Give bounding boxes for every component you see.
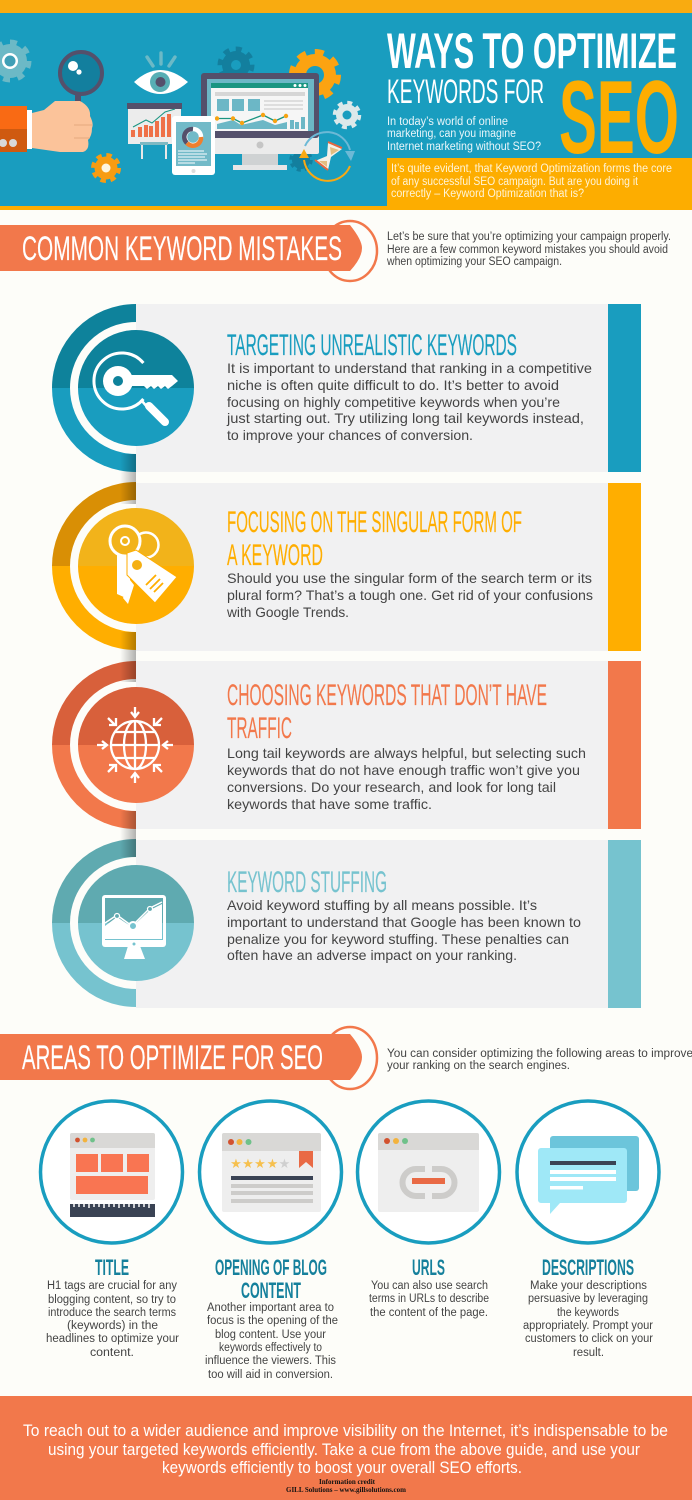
column: descriptions: result. [573,1347,604,1359]
icon: pale gear [334,102,360,128]
heading: TRAFFIC [227,712,292,745]
body text: keywords that have some traffic. [227,796,432,812]
body text: just starting out. Try utilizing long tail keywords instead, [226,410,584,426]
column: opening of blog content: blog content. Use your [215,1329,326,1341]
body text: niche is often quite difficult to do. It’s better to avoid [227,377,559,393]
title: keywords for: KEYWORDS FOR [387,73,544,111]
header question text: Internet marketing without SEO? [387,141,541,153]
icon: eye [134,53,188,94]
column: title: (keywords) in the [67,1320,158,1332]
column: urls: URLS [412,1255,445,1280]
body text: to improve your chances of conversion. [227,427,473,443]
column: title: headlines to optimize your [46,1333,179,1345]
column: descriptions: Make your descriptions [530,1280,647,1292]
intro text: mistakes: Here are a few common keyword mistakes you should avoid [387,244,668,256]
icon: analytics monitor [102,895,166,959]
column: descriptions [523,1255,653,1359]
header orange text: correctly – Keyword Optimization that is? [391,188,584,200]
column: title: introduce the search terms [48,1307,176,1319]
icon circle: opening of blog content: ★ [230,1157,242,1172]
body text: with Google Trends. [226,604,349,620]
intro text: areas [387,1048,692,1072]
column: opening of blog content: keywords effectively to [219,1342,322,1354]
panel: targeting unrealistic keywords [52,304,641,472]
body text [227,745,586,812]
heading: A KEYWORD [227,539,323,572]
closing text [23,1421,668,1477]
heading: KEYWORD STUFFING [227,866,387,899]
icon circle: opening of blog content: ★ [242,1157,254,1172]
icon: lower dark gear [291,150,311,170]
icon: globe with arrows [97,707,173,783]
header panel [0,0,692,210]
heading [227,506,522,572]
closing text: using your targeted keywords efficiently. Take a cue from the above guide, and use your [48,1440,640,1459]
body text: important to understand that Google has been known to [227,914,581,930]
column: descriptions: customers to click on your [525,1333,653,1345]
column: title: TITLE [95,1255,129,1280]
intro text: mistakes [386,231,671,268]
body text: conversions. Do your research, and look for long tail [227,779,556,795]
column: opening of blog content: CONTENT [241,1278,301,1303]
footer panel [0,1396,692,1500]
header orange text [391,163,672,200]
column: title: content. [90,1347,134,1359]
header question text: marketing, can you imagine [387,128,516,140]
column: opening of blog content [205,1255,338,1381]
body text [226,360,592,443]
column: opening of blog content: focus is the opening of the [207,1315,338,1327]
column: opening of blog content: Another important area to [207,1302,334,1314]
column: title [46,1255,179,1359]
icon: magnifier [60,52,102,108]
body text [227,897,581,963]
icon: tablet [172,116,215,175]
column: opening of blog content: influence the viewers. This [205,1355,336,1367]
icon circle: opening of blog content: ★ [254,1157,266,1172]
intro text: areas: your ranking on the search engines. [387,1060,570,1072]
body text: plural form? That’s a tough one. Get rid of your confusions [227,587,593,603]
heading banner: common keyword mistakes [0,221,377,281]
column: urls: You can also use search [371,1280,488,1292]
heading banner: common keyword mistakes: COMMON KEYWORD MISTAKES [22,230,342,268]
panel: focusing on the singular form [52,482,641,651]
icon circle: descriptions [517,1101,659,1243]
body text: keywords that do not have enough traffic won’t give you [227,762,580,778]
heading banner: areas to optimize: AREAS TO OPTIMIZE FOR SEO [22,1039,323,1077]
body text: Long tail keywords are always helpful, but selecting such [227,745,586,761]
column: title: blogging content, so try to [48,1294,176,1306]
icon: keys with tag [110,526,177,604]
body text: It is important to understand that ranking in a competitive [227,360,592,376]
column: urls: terms in URLs to describe [369,1293,489,1305]
column: urls: the content of the page. [370,1307,488,1319]
icon: presentation chart [127,103,182,159]
column: title: H1 tags are crucial for any [47,1280,177,1292]
body text: often have an adverse impact on your ranking. [227,947,517,963]
icon circle: opening of blog content [200,1101,342,1243]
column: urls [369,1255,489,1319]
icon: hourglass [299,132,355,181]
information credit: GILL Solutions – www.gillsolutions.com [286,1485,407,1494]
column: descriptions: appropriately. Prompt your [523,1320,653,1332]
icon circle: urls [358,1101,500,1243]
icon: monitor [201,73,319,170]
icon circle: opening of blog content: ★ [279,1157,290,1172]
closing text: keywords efficiently to boost your overall SEO efforts. [162,1458,522,1477]
icon: key in magnifier [94,353,178,422]
information credit: Information credit [319,1477,375,1486]
icon: hand and cuff [0,101,93,152]
heading banner: areas to optimize [0,1027,377,1089]
header question text: In today’s world of online [387,116,508,128]
column: opening of blog content: OPENING OF BLOG [215,1255,327,1280]
header question text [387,116,541,153]
intro text: areas: You can consider optimizing the following areas to improve [387,1048,692,1060]
information credit [286,1477,407,1494]
heading [227,679,547,745]
body text: focusing on highly competitive keywords when you’re [227,394,560,410]
icon circle: opening of blog content: ★ [267,1157,278,1172]
body text: Avoid keyword stuffing by all means possible. It’s [227,897,537,913]
body text: Should you use the singular form of the search term or its [227,570,592,586]
panel: choosing keywords without traffic [52,661,641,829]
column: opening of blog content: too will aid in conversion. [208,1369,333,1381]
icon: large orange gear [292,52,338,98]
header orange text: of any successful SEO campaign. But are you doing it [391,176,639,188]
illustration: SEO tools [0,42,360,181]
intro text: mistakes: when optimizing your SEO campaign. [386,256,562,268]
column: descriptions: the keywords [557,1307,619,1319]
icon: dark gear [220,49,252,81]
column: descriptions: persuasive by leveraging [528,1293,648,1305]
header orange text: It’s quite evident, that Keyword Optimization forms the core [391,163,672,175]
body text [226,570,593,620]
icon: left gear [0,42,29,80]
panel: keyword stuffing [52,839,641,1008]
icon circle: title [40,1101,182,1243]
body text: penalize you for keyword stuffing. These penalties can [227,931,569,947]
intro text: mistakes: Let’s be sure that you’re optimizing your campaign properly. [387,231,671,243]
card junction shadows [120,454,136,857]
icon: orange small gear [93,155,119,181]
